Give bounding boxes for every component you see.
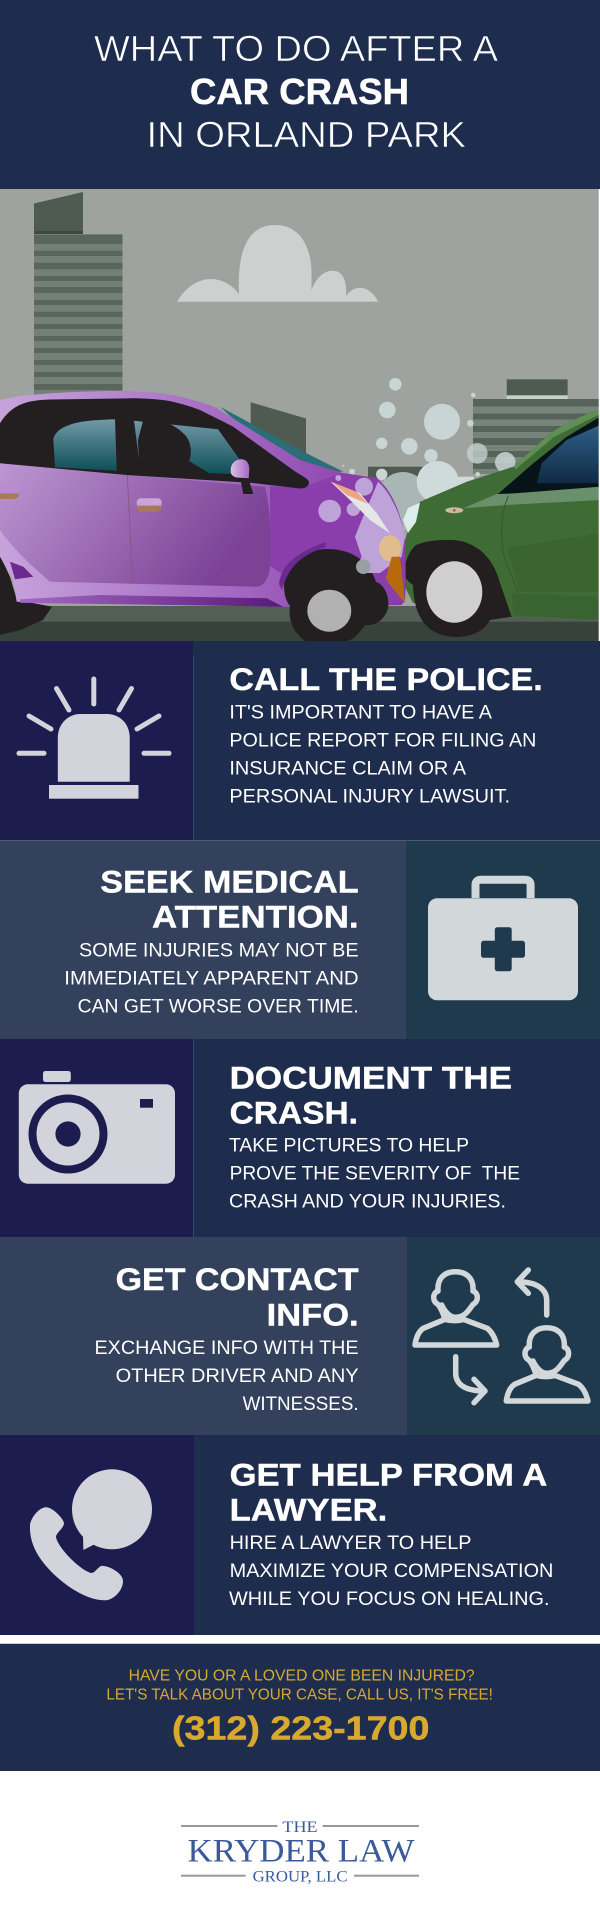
windshield edge bbox=[220, 407, 343, 472]
step 2: seek medical attention bbox=[0, 840, 600, 1039]
heading bbox=[230, 1059, 512, 1130]
body text: MAXIMIZE YOUR COMPENSATION bbox=[230, 1561, 553, 1582]
seat headrest bbox=[130, 420, 212, 475]
damage plume bbox=[318, 475, 405, 573]
lower door bbox=[507, 533, 600, 592]
body text: PROVE THE SEVERITY OF THE bbox=[230, 1164, 520, 1185]
roof strip bbox=[513, 409, 600, 469]
rear wheel bbox=[0, 555, 52, 635]
body text: INSURANCE CLAIM OR A bbox=[229, 759, 466, 780]
logo: the kryder law group bbox=[181, 1819, 419, 1885]
hero illustration: car crash bbox=[0, 189, 600, 641]
logo: the kryder law group: KRYDER LAW bbox=[188, 1834, 415, 1870]
body text: EXCHANGE INFO WITH THE bbox=[94, 1338, 359, 1359]
headlight bbox=[403, 503, 420, 533]
heading bbox=[116, 1261, 359, 1332]
step 5: get help from a lawyer bbox=[0, 1435, 600, 1635]
body text: POLICE REPORT FOR FILING AN bbox=[229, 731, 536, 752]
heading: SEEK MEDICAL bbox=[100, 863, 359, 899]
body text: SOME INJURIES MAY NOT BE bbox=[79, 941, 359, 962]
front wheel bbox=[284, 549, 388, 641]
heading: LAWYER. bbox=[230, 1492, 387, 1528]
hub bbox=[307, 590, 351, 632]
body bbox=[0, 391, 406, 607]
logo: the kryder law group: THE bbox=[282, 1819, 318, 1836]
body text: OTHER DRIVER AND ANY bbox=[116, 1366, 359, 1387]
window frame bbox=[0, 398, 309, 489]
side windows bbox=[53, 419, 117, 471]
icon: exchanging contacts bbox=[415, 1270, 588, 1403]
phone number: (312) 223-1700 bbox=[172, 1709, 429, 1746]
body text: PERSONAL INJURY LAWSUIT. bbox=[229, 787, 510, 808]
body text bbox=[229, 1533, 553, 1610]
title text: CAR CRASH bbox=[190, 71, 409, 112]
title text: WHAT TO DO AFTER A bbox=[94, 28, 498, 69]
icon: siren bbox=[19, 679, 169, 799]
fender highlight bbox=[463, 487, 600, 508]
heading: INFO. bbox=[267, 1296, 359, 1332]
step 1: call the police bbox=[0, 641, 600, 840]
front fender tone bbox=[270, 473, 405, 606]
tall building bbox=[34, 192, 122, 404]
heading: CALL THE POLICE. bbox=[229, 661, 543, 697]
side marker bbox=[445, 507, 463, 513]
cloud bbox=[177, 225, 378, 302]
door seam bbox=[127, 475, 133, 583]
body text: WITNESSES. bbox=[243, 1394, 359, 1415]
icon: first aid kit bbox=[428, 880, 578, 1000]
mirror bbox=[240, 477, 253, 494]
body text: CRASH AND YOUR INJURIES. bbox=[229, 1192, 506, 1213]
smoke bbox=[342, 378, 516, 530]
step 4: get contact info bbox=[0, 1237, 600, 1435]
front wheel arch bbox=[404, 540, 512, 637]
heading bbox=[230, 1457, 547, 1528]
right building bbox=[473, 379, 600, 474]
purple car bbox=[0, 391, 406, 641]
window bbox=[497, 417, 600, 495]
door seam bbox=[502, 496, 520, 597]
body text: TAKE PICTURES TO HELP bbox=[229, 1136, 469, 1157]
broken headlight bbox=[331, 482, 390, 533]
icon: phone and speech bubble bbox=[30, 1469, 152, 1600]
call to action text bbox=[106, 1667, 493, 1703]
rear wheel arch detail bbox=[10, 562, 33, 579]
body text: HIRE A LAWYER TO HELP bbox=[230, 1533, 472, 1554]
icon: camera bbox=[19, 1071, 175, 1184]
heading: GET HELP FROM A bbox=[230, 1457, 547, 1493]
title text: IN ORLAND PARK bbox=[146, 114, 466, 155]
green car bbox=[400, 409, 600, 637]
body text: IT'S IMPORTANT TO HAVE A bbox=[229, 703, 492, 724]
step 3: document the crash bbox=[0, 1039, 600, 1237]
body text bbox=[64, 941, 359, 1018]
body text: IMMEDIATELY APPARENT AND bbox=[64, 969, 359, 990]
body text: WHILE YOU FOCUS ON HEALING. bbox=[229, 1589, 550, 1610]
heading bbox=[100, 863, 359, 935]
call to action text: LET'S TALK ABOUT YOUR CASE, CALL US, IT'S FREE! bbox=[106, 1686, 493, 1703]
arch trim bbox=[279, 542, 326, 590]
body text bbox=[229, 1136, 520, 1213]
door handles bbox=[0, 486, 162, 512]
logo: the kryder law group: GROUP, LLC bbox=[253, 1868, 348, 1885]
front hub bbox=[426, 561, 482, 623]
call to action band bbox=[0, 1643, 600, 1771]
body text: CAN GET WORSE OVER TIME. bbox=[78, 997, 359, 1018]
mid building bbox=[251, 402, 306, 470]
heading: DOCUMENT THE bbox=[230, 1059, 512, 1095]
body text bbox=[94, 1338, 359, 1415]
heading: CRASH. bbox=[230, 1094, 358, 1130]
title text bbox=[94, 28, 498, 155]
title banner bbox=[0, 0, 600, 189]
road bbox=[0, 606, 600, 641]
rocker sill bbox=[20, 595, 283, 607]
call to action text: HAVE YOU OR A LOVED ONE BEEN INJURED? bbox=[129, 1667, 475, 1684]
door panel bbox=[0, 463, 270, 587]
heading: ATTENTION. bbox=[152, 899, 359, 935]
heading: GET CONTACT bbox=[116, 1261, 359, 1297]
body text bbox=[229, 703, 536, 808]
